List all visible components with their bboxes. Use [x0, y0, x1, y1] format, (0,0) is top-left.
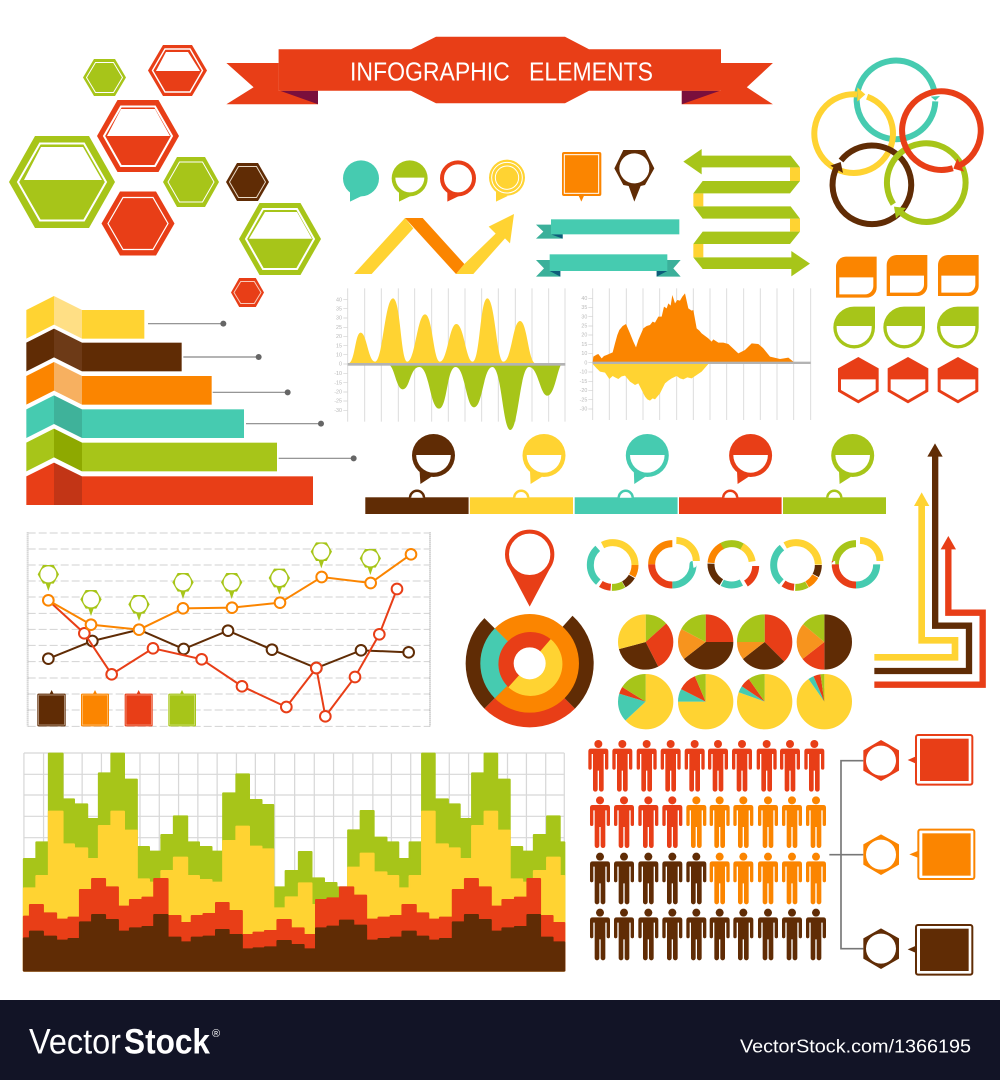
right chart axis labels: 15 — [581, 342, 587, 348]
left chart axis labels: -10 — [334, 371, 342, 377]
left chart axis labels: 20 — [336, 334, 342, 340]
left chart axis labels: -25 — [334, 399, 342, 405]
pie chart row 2 — [632, 688, 838, 715]
right chart axis labels: 25 — [581, 324, 587, 330]
right chart axis labels: -20 — [580, 388, 587, 394]
timeline with speech bubbles — [365, 434, 886, 514]
left chart axis labels: -20 — [334, 390, 342, 396]
title banner — [226, 37, 773, 104]
small donut 3 — [711, 544, 756, 587]
timeline segment green — [783, 434, 886, 514]
pie 1 — [632, 628, 659, 656]
left wave chart — [334, 288, 565, 430]
green snake arrow — [683, 149, 810, 276]
line chart — [28, 532, 430, 727]
pie 5 — [632, 688, 659, 715]
brown layer — [24, 915, 564, 971]
stepped horizontal bar chart — [26, 296, 357, 505]
timeline segment yellow — [470, 434, 573, 514]
row 4 people — [590, 909, 826, 960]
orange note pin — [562, 152, 601, 202]
footer url: VectorStock.com/1366195 — [740, 1035, 971, 1056]
yellow bent arrow — [874, 492, 955, 657]
yellow ring speech bubble — [489, 160, 525, 202]
right green hexagon half filled — [239, 203, 321, 275]
row 2 people — [590, 796, 826, 848]
right chart axis labels: 40 — [581, 296, 587, 302]
yellow layer — [24, 812, 564, 971]
red bar — [26, 463, 313, 505]
large green hexagon — [9, 136, 115, 228]
brown hexagon — [226, 163, 269, 201]
footer logo — [29, 1022, 220, 1061]
red ring — [902, 91, 981, 172]
interlocking arrow rings — [814, 61, 981, 403]
green pins — [38, 542, 381, 621]
orange bar — [26, 362, 212, 405]
left chart axis labels: 40 — [336, 297, 342, 303]
green ring — [887, 143, 966, 222]
red bent arrow — [874, 536, 983, 685]
speech bubbles — [343, 160, 525, 202]
small green hexagon — [83, 59, 126, 96]
tiny red hexagon — [231, 278, 264, 307]
left chart axis labels: 10 — [336, 352, 342, 358]
leader lines with dots — [148, 321, 357, 461]
brown bar — [26, 329, 182, 371]
teal ring — [857, 61, 940, 139]
pie 4 — [810, 628, 838, 656]
upper teal ribbon — [536, 219, 679, 239]
left chart axis labels: 0 — [339, 362, 342, 368]
timeline segment brown — [365, 434, 469, 514]
donut, pin and pie charts — [466, 532, 880, 727]
stacked step area chart — [24, 753, 564, 971]
timeline segment red — [679, 434, 782, 514]
hexagon cluster — [9, 45, 321, 307]
people pictogram grid and org tree — [588, 735, 974, 975]
title text: INFOGRAPHIC ELEMENTS — [350, 59, 653, 87]
pie 6 — [692, 688, 719, 715]
red location pin — [507, 532, 552, 607]
right wave chart — [580, 288, 811, 420]
brown bent arrow — [874, 443, 969, 671]
red layer — [24, 879, 564, 971]
brown ring — [830, 145, 911, 224]
zigzag arrow — [354, 214, 514, 274]
lower red hexagon — [102, 192, 174, 256]
timeline segment teal — [575, 434, 678, 514]
legend swatches — [37, 690, 196, 726]
org tree connectors — [829, 761, 863, 949]
orange hexagon node and box — [863, 830, 974, 879]
green layer — [24, 754, 564, 971]
lower teal ribbon — [536, 254, 681, 277]
row 3 people — [590, 853, 826, 904]
yellow bar — [26, 296, 144, 339]
right chart axis labels: 30 — [581, 314, 587, 320]
red series — [48, 584, 402, 722]
small donut 2 — [652, 540, 696, 585]
left chart axis labels: 30 — [336, 316, 342, 322]
medium green hexagon — [163, 157, 219, 207]
small donut 5 — [835, 540, 880, 585]
left chart axis labels: 35 — [336, 306, 342, 312]
left chart axis labels: -30 — [334, 408, 342, 414]
people grid — [588, 740, 826, 960]
middle top icons, arrows, ribbons and wave charts — [334, 149, 811, 430]
footer logo: ® — [212, 1028, 220, 1040]
right chart axis labels: -30 — [580, 407, 587, 413]
footer band — [0, 1000, 1000, 1080]
brown hexagon pin — [614, 150, 654, 202]
left chart axis labels: 15 — [336, 343, 342, 349]
right chart axis labels: 10 — [581, 351, 587, 357]
left chart axis labels: 25 — [336, 325, 342, 331]
teal speech bubble — [343, 160, 379, 202]
red hexagon cards — [838, 357, 978, 403]
green bar — [26, 429, 277, 471]
large layered donut — [466, 614, 594, 727]
pie 7 — [751, 688, 778, 715]
red hexagon half filled — [97, 100, 179, 172]
right chart axis labels — [580, 296, 587, 413]
brown series — [43, 625, 414, 673]
pie chart row 1 — [632, 628, 838, 656]
pie 3 — [751, 628, 778, 656]
left chart axis labels — [334, 297, 342, 414]
right chart axis labels: 0 — [584, 360, 587, 366]
right chart axis labels: 20 — [581, 333, 587, 339]
pie 8 — [810, 688, 838, 715]
footer logo: Stock — [124, 1022, 210, 1061]
teal bar — [26, 395, 244, 438]
three bent arrows — [874, 443, 983, 685]
small donut 1 — [590, 543, 635, 587]
orange cards — [836, 255, 979, 298]
red hexagon node and box — [863, 735, 972, 785]
right chart axis labels: -15 — [580, 379, 587, 385]
small donut 4 — [774, 543, 818, 587]
right chart axis labels: 35 — [581, 305, 587, 311]
right chart axis labels: -10 — [580, 370, 587, 376]
right chart axis labels: -25 — [580, 397, 587, 403]
footer logo: Vector — [29, 1022, 121, 1061]
pie 2 — [692, 628, 719, 656]
small red hexagon half filled — [148, 45, 207, 96]
green teardrop cards — [833, 307, 979, 348]
green speech bubble — [392, 160, 428, 202]
row 1 people — [588, 740, 824, 792]
brown hexagon node and box — [863, 925, 972, 975]
orange series — [43, 549, 416, 635]
yellow ring — [814, 87, 893, 173]
left chart axis labels: -15 — [334, 380, 342, 386]
red ring speech bubble — [442, 162, 474, 202]
